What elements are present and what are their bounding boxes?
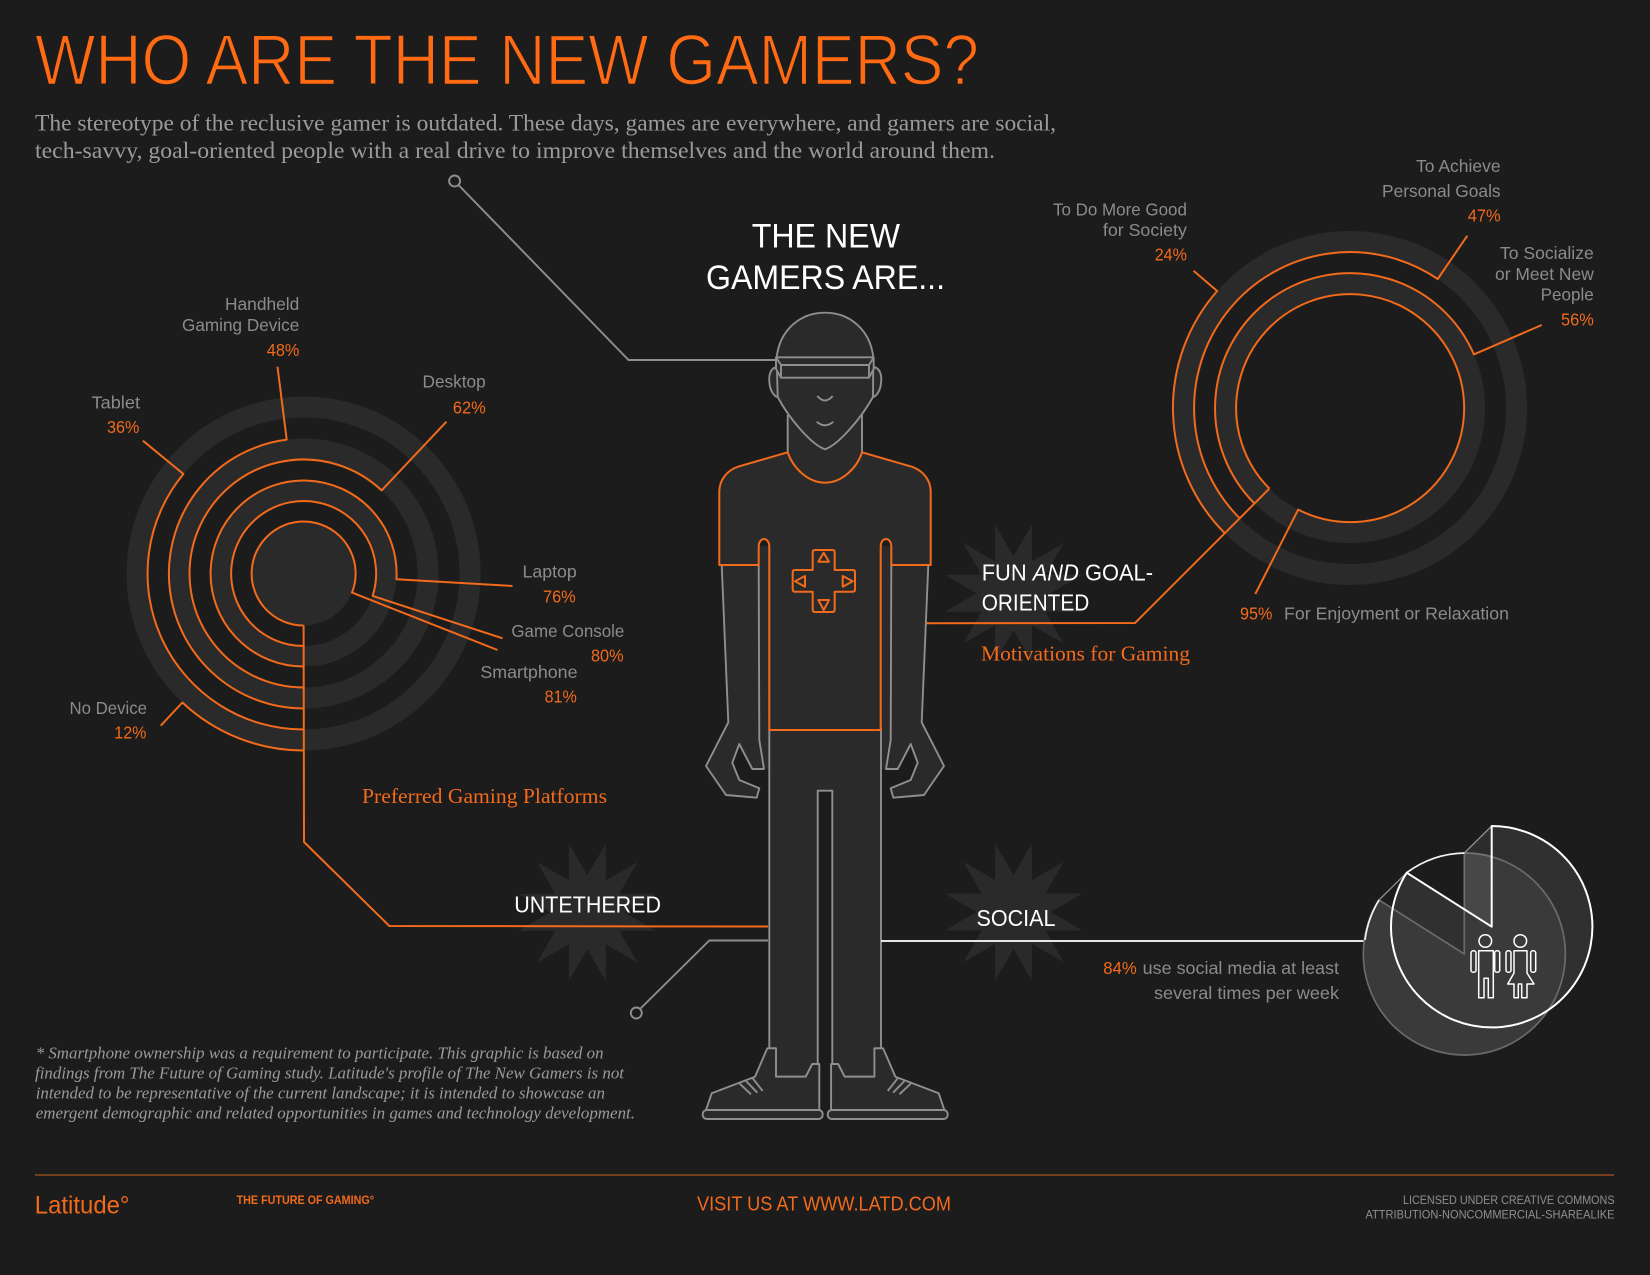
connector: headset callout — [449, 176, 776, 360]
label: game console — [511, 621, 624, 666]
label: handheld — [182, 294, 299, 360]
connector: platforms to figure — [304, 626, 768, 926]
right shoe — [828, 1048, 948, 1119]
license: LICENSED UNDER CREATIVE COMMONS — [1403, 1195, 1615, 1207]
label: good for society: 24% — [1155, 245, 1187, 265]
footnote: emergent demographic and related opportunities in games and technology development. — [36, 1103, 635, 1122]
label: personal goals: 47% — [1468, 206, 1501, 226]
chart: social pie 84% — [1363, 826, 1592, 1055]
radial bar chart: motivations — [1173, 236, 1542, 594]
website link: VISIT US AT WWW.LATD.COM — [697, 1193, 951, 1216]
label: smartphone — [480, 662, 578, 707]
license: ATTRIBUTION-NONCOMMERCIAL-SHAREALIKE — [1366, 1210, 1615, 1222]
label: no device — [70, 698, 147, 743]
left arm — [706, 565, 764, 798]
title: WHO ARE THE NEW GAMERS? — [35, 21, 979, 100]
label: enjoyment: 95% — [1240, 604, 1272, 624]
connector: figure to social pie — [881, 940, 1365, 942]
heading: the new gamers are — [706, 218, 945, 297]
label: game console: 80% — [591, 646, 624, 666]
footnote: intended to be representative of the current landscape; it is intended to showcase an — [36, 1083, 605, 1102]
intro text: The stereotype of the reclusive gamer is outdated. These days, games are everywhere, and gamers are social, — [35, 111, 1056, 136]
footnote: findings from The Future of Gaming study. Latitude's profile of The New Gamers is not — [35, 1063, 625, 1082]
label: smartphone: 81% — [545, 687, 577, 707]
label: handheld: Handheld — [225, 294, 299, 314]
stat text: social media use: several times per week — [1154, 983, 1339, 1003]
label: personal goals: To Achieve — [1416, 156, 1501, 176]
tagline: THE FUTURE OF GAMING° — [237, 1193, 374, 1207]
label: desktop: 62% — [453, 397, 486, 417]
label: enjoyment: For Enjoyment or Relaxation — [1284, 604, 1509, 624]
panel: preferred gaming platforms — [70, 294, 768, 926]
ears — [769, 367, 881, 397]
label: handheld: Gaming Device — [182, 315, 299, 335]
panel: social — [881, 826, 1592, 1055]
intro text — [35, 111, 1056, 163]
chart caption: motivations for gaming: Motivations for Gaming — [981, 642, 1191, 666]
starbursts — [519, 525, 1082, 981]
label: socialize — [1495, 243, 1594, 330]
heading: the new gamers are: THE NEW — [752, 218, 900, 256]
radial bar chart: platforms — [137, 367, 512, 750]
heading: fun and goal-oriented — [982, 560, 1153, 616]
figure: gamer — [703, 313, 948, 1119]
heading: fun and goal-oriented: FUN AND GOAL- — [982, 560, 1153, 586]
label: socialize: People — [1541, 285, 1594, 305]
headset — [776, 357, 874, 378]
connector: lower callout — [631, 940, 768, 1018]
label: laptop: 76% — [543, 587, 576, 607]
label: game console: Game Console — [511, 621, 624, 641]
icon: female figure — [1506, 935, 1536, 998]
label: socialize: or Meet New — [1495, 264, 1594, 284]
label: socialize: 56% — [1561, 310, 1594, 330]
license — [1366, 1195, 1615, 1222]
label: no device: No Device — [70, 698, 147, 718]
panel: motivations for gaming — [926, 156, 1594, 666]
label: desktop — [422, 372, 486, 417]
face details — [817, 396, 833, 425]
label: personal goals — [1382, 156, 1501, 226]
label: tablet — [92, 392, 140, 437]
label: personal goals: Personal Goals — [1382, 181, 1501, 201]
heading: fun and goal-oriented: ORIENTED — [982, 590, 1089, 616]
stat text: social media use — [1103, 958, 1339, 1003]
label: desktop: Desktop — [422, 372, 486, 392]
stat text: social media use: 84% — [1103, 958, 1137, 978]
label: no device: 12% — [114, 723, 146, 743]
label: good for society — [1053, 200, 1187, 265]
label: smartphone: Smartphone — [480, 662, 578, 682]
heading: untethered: UNTETHERED — [514, 891, 661, 917]
connector: motivations to figure — [926, 489, 1269, 623]
logo: latitude: Latitude° — [35, 1192, 129, 1220]
t-shirt — [719, 452, 931, 730]
label: socialize: To Socialize — [1500, 243, 1594, 263]
footnote — [35, 1043, 635, 1122]
label: laptop: Laptop — [522, 562, 577, 582]
icon: male figure — [1471, 935, 1500, 998]
head and face — [777, 313, 873, 449]
left shoe — [703, 1048, 823, 1119]
icon: d-pad — [793, 550, 855, 612]
intro text: tech-savvy, goal-oriented people with a real drive to improve themselves and the world around them. — [35, 138, 995, 163]
chart caption: preferred gaming platforms: Preferred Gaming Platforms — [362, 784, 607, 808]
label: handheld: 48% — [267, 340, 299, 360]
stat text: social media use: use social media at least — [1143, 958, 1339, 978]
heading: the new gamers are: GAMERS ARE... — [706, 259, 945, 297]
neck — [788, 415, 862, 485]
right arm — [886, 565, 944, 798]
arm-to-torso slits fill — [759, 546, 891, 769]
label: tablet: 36% — [107, 417, 139, 437]
label: good for society: To Do More Good — [1053, 200, 1187, 220]
footer — [35, 1175, 1615, 1222]
label: laptop — [522, 562, 577, 607]
footnote: * Smartphone ownership was a requirement to participate. This graphic is based on — [36, 1043, 604, 1062]
label: tablet: Tablet — [92, 392, 140, 412]
heading: social: SOCIAL — [976, 905, 1056, 931]
label: good for society: for Society — [1103, 220, 1187, 240]
legs — [769, 728, 881, 1077]
